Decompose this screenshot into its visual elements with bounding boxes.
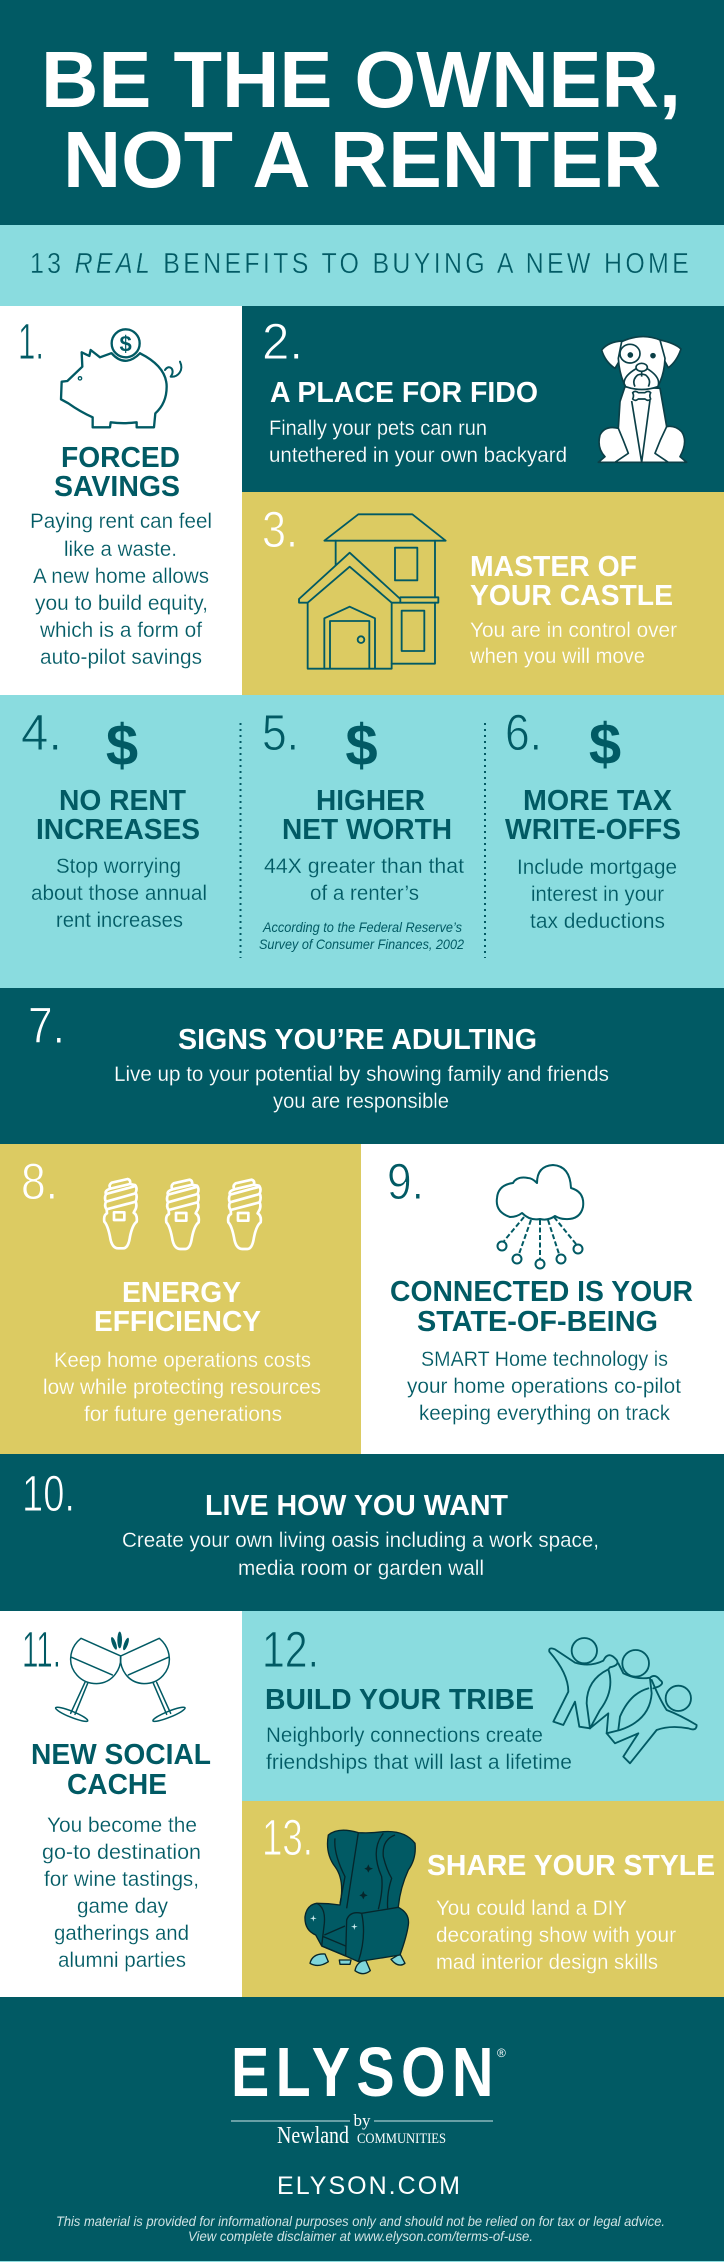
icon: piggy bank: $ bbox=[120, 331, 132, 356]
icon: dog bbox=[598, 337, 687, 462]
disclaimer bbox=[56, 2213, 665, 2244]
text block: Create your own living oasis including a work space, bbox=[122, 1529, 599, 1552]
panel: 3 master of your castle bbox=[242, 492, 724, 695]
icon: house bbox=[299, 514, 446, 669]
heading: BUILD YOUR TRIBE bbox=[265, 1684, 534, 1716]
heading: EFFICIENCY bbox=[94, 1306, 261, 1338]
text block: auto-pilot savings bbox=[40, 646, 202, 669]
heading: CACHE bbox=[67, 1769, 167, 1801]
text block: go-to destination bbox=[42, 1841, 201, 1864]
icon: wine glasses bbox=[54, 1632, 186, 1724]
text block bbox=[43, 1349, 321, 1426]
text block: which is a form of bbox=[39, 619, 202, 642]
number 4: 4. bbox=[21, 704, 62, 761]
text block: Stop worrying bbox=[56, 855, 181, 878]
text block bbox=[42, 1814, 201, 1972]
text block bbox=[436, 1897, 676, 1974]
text block: for future generations bbox=[84, 1403, 282, 1426]
text block: A new home allows bbox=[33, 565, 209, 588]
icon: dollar sign: $ bbox=[589, 712, 621, 777]
text block: like a waste. bbox=[64, 538, 177, 561]
text block: Neighborly connections create bbox=[266, 1724, 543, 1747]
text block bbox=[517, 856, 677, 933]
text block bbox=[264, 855, 464, 905]
text block: mad interior design skills bbox=[436, 1951, 658, 1974]
text block: tax deductions bbox=[530, 910, 665, 933]
title bbox=[41, 35, 681, 204]
number 10: 10. bbox=[22, 1465, 75, 1522]
text block: You become the bbox=[47, 1814, 197, 1837]
number 6: 6. bbox=[505, 704, 542, 761]
text block: interest in your bbox=[531, 883, 664, 906]
icon: dollar sign: $ bbox=[345, 713, 378, 778]
number 5: 5. bbox=[262, 704, 299, 761]
text block: low while protecting resources bbox=[43, 1376, 321, 1399]
text block: about those annual bbox=[31, 882, 207, 905]
icon: group of people bbox=[549, 1638, 697, 1763]
icon: wing chair bbox=[305, 1830, 415, 1974]
source note: According to the Federal Reserve’s bbox=[262, 919, 462, 935]
text block: Keep home operations costs bbox=[54, 1349, 311, 1372]
source note bbox=[259, 919, 464, 952]
heading: YOUR CASTLE bbox=[470, 580, 673, 612]
text block: SMART Home technology is bbox=[421, 1348, 668, 1371]
title: NOT A RENTER bbox=[63, 115, 661, 204]
logo: Elyson by Newland Communities: by bbox=[354, 2111, 371, 2130]
heading bbox=[505, 785, 681, 846]
title: BE THE OWNER, bbox=[41, 35, 681, 124]
heading: WRITE-OFFS bbox=[505, 814, 681, 846]
text block bbox=[30, 510, 212, 669]
heading bbox=[390, 1276, 693, 1338]
number 9: 9. bbox=[387, 1153, 424, 1210]
logo: Elyson by Newland Communities: ® bbox=[497, 2046, 506, 2060]
disclaimer: This material is provided for informational purposes only and should not be relied on for tax or legal advice. bbox=[56, 2213, 665, 2229]
text block: decorating show with your bbox=[436, 1924, 676, 1947]
text block: friendships that will last a lifetime bbox=[266, 1751, 572, 1774]
text block: You are in control over bbox=[470, 619, 677, 642]
number 2: 2. bbox=[262, 313, 303, 370]
panel: footer bbox=[0, 1997, 724, 2262]
number 8: 8. bbox=[21, 1153, 58, 1210]
text block: rent increases bbox=[56, 909, 183, 932]
heading: A PLACE FOR FIDO bbox=[270, 377, 538, 409]
panel: 12 build your tribe bbox=[242, 1611, 724, 1801]
number 13: 13. bbox=[262, 1809, 313, 1866]
heading: CONNECTED IS YOUR bbox=[390, 1276, 693, 1308]
number 12: 12. bbox=[262, 1621, 319, 1678]
panel: subtitle band bbox=[0, 225, 724, 306]
heading: MASTER OF bbox=[470, 551, 637, 583]
text block bbox=[31, 855, 207, 932]
heading: INCREASES bbox=[36, 814, 200, 846]
text block bbox=[469, 619, 677, 668]
text block: You could land a DIY bbox=[436, 1897, 627, 1920]
number 7: 7. bbox=[28, 997, 65, 1054]
heading bbox=[31, 1739, 211, 1801]
text block: when you will move bbox=[469, 645, 645, 668]
source note: Survey of Consumer Finances, 2002 bbox=[259, 936, 464, 952]
logo: Elyson by Newland Communities: ELYSON bbox=[231, 2033, 493, 2111]
heading bbox=[94, 1277, 261, 1338]
text block: of a renter’s bbox=[310, 882, 419, 905]
text block bbox=[269, 417, 567, 467]
panel: 10 live how you want bbox=[0, 1454, 724, 1611]
icon: cloud network bbox=[497, 1165, 583, 1268]
panel: 2 a place for fido bbox=[242, 306, 724, 492]
heading: MORE TAX bbox=[523, 785, 672, 817]
text block: Finally your pets can run bbox=[269, 417, 487, 440]
panel: 8 energy efficiency bbox=[0, 1144, 361, 1454]
text block bbox=[114, 1063, 609, 1113]
disclaimer: View complete disclaimer at www.elyson.com/terms-of-use. bbox=[188, 2228, 533, 2244]
panel: 13 share your style bbox=[242, 1801, 724, 1997]
heading: NEW SOCIAL bbox=[31, 1739, 211, 1771]
text block bbox=[122, 1529, 599, 1580]
panel: 4 5 6 financial benefits bbox=[0, 695, 724, 988]
text block: untethered in your own backyard bbox=[269, 444, 567, 467]
heading: STATE-OF-BEING bbox=[417, 1306, 658, 1338]
heading bbox=[36, 785, 200, 846]
text block: keeping everything on track bbox=[419, 1402, 670, 1425]
panel: 11 new social cache bbox=[0, 1611, 242, 1997]
text block: media room or garden wall bbox=[238, 1557, 484, 1580]
text block: gatherings and bbox=[54, 1922, 189, 1945]
text block: you to build equity, bbox=[35, 592, 208, 615]
heading: HIGHER bbox=[316, 785, 425, 817]
panel: 1 forced savings bbox=[0, 306, 242, 695]
logo: Elyson by Newland Communities: Newland bbox=[277, 2123, 349, 2149]
logo: Elyson by Newland Communities: COMMUNITIES bbox=[357, 2131, 446, 2147]
text block: you are responsible bbox=[273, 1090, 449, 1113]
icon: dollar sign: $ bbox=[106, 713, 138, 778]
text block: Include mortgage bbox=[517, 856, 677, 879]
heading: NET WORTH bbox=[282, 814, 452, 846]
text block: 44X greater than that bbox=[264, 855, 464, 878]
heading: FORCED bbox=[61, 442, 180, 474]
number 1: 1. bbox=[18, 313, 44, 370]
text block: Live up to your potential by showing family and friends bbox=[114, 1063, 609, 1086]
subtitle: 13 REAL BENEFITS TO BUYING A NEW HOME bbox=[30, 247, 689, 279]
icon: light bulbs bbox=[104, 1179, 261, 1249]
logo: Elyson by Newland Communities bbox=[231, 2033, 506, 2149]
text block: Paying rent can feel bbox=[30, 510, 212, 533]
text block: your home operations co-pilot bbox=[407, 1375, 681, 1398]
heading: SIGNS YOU’RE ADULTING bbox=[178, 1024, 537, 1056]
text block bbox=[407, 1348, 681, 1425]
panel: 9 connected bbox=[361, 1144, 724, 1454]
heading bbox=[282, 785, 452, 846]
text block bbox=[266, 1724, 572, 1774]
heading bbox=[54, 442, 180, 503]
heading: SAVINGS bbox=[54, 471, 180, 503]
website url: ELYSON.COM bbox=[277, 2172, 460, 2200]
icon: piggy bank bbox=[61, 329, 181, 427]
number 3: 3. bbox=[262, 501, 298, 558]
heading: ENERGY bbox=[122, 1277, 241, 1309]
heading bbox=[470, 551, 673, 612]
heading: NO RENT bbox=[59, 785, 187, 817]
panel: 7 signs you're adulting bbox=[0, 988, 724, 1144]
text block: for wine tastings, bbox=[44, 1868, 199, 1891]
number 11: 11. bbox=[22, 1621, 61, 1678]
text block: alumni parties bbox=[58, 1949, 186, 1972]
panel: title header bbox=[0, 0, 724, 225]
heading: SHARE YOUR STYLE bbox=[427, 1850, 715, 1882]
text block: game day bbox=[77, 1895, 168, 1918]
heading: LIVE HOW YOU WANT bbox=[205, 1490, 509, 1522]
